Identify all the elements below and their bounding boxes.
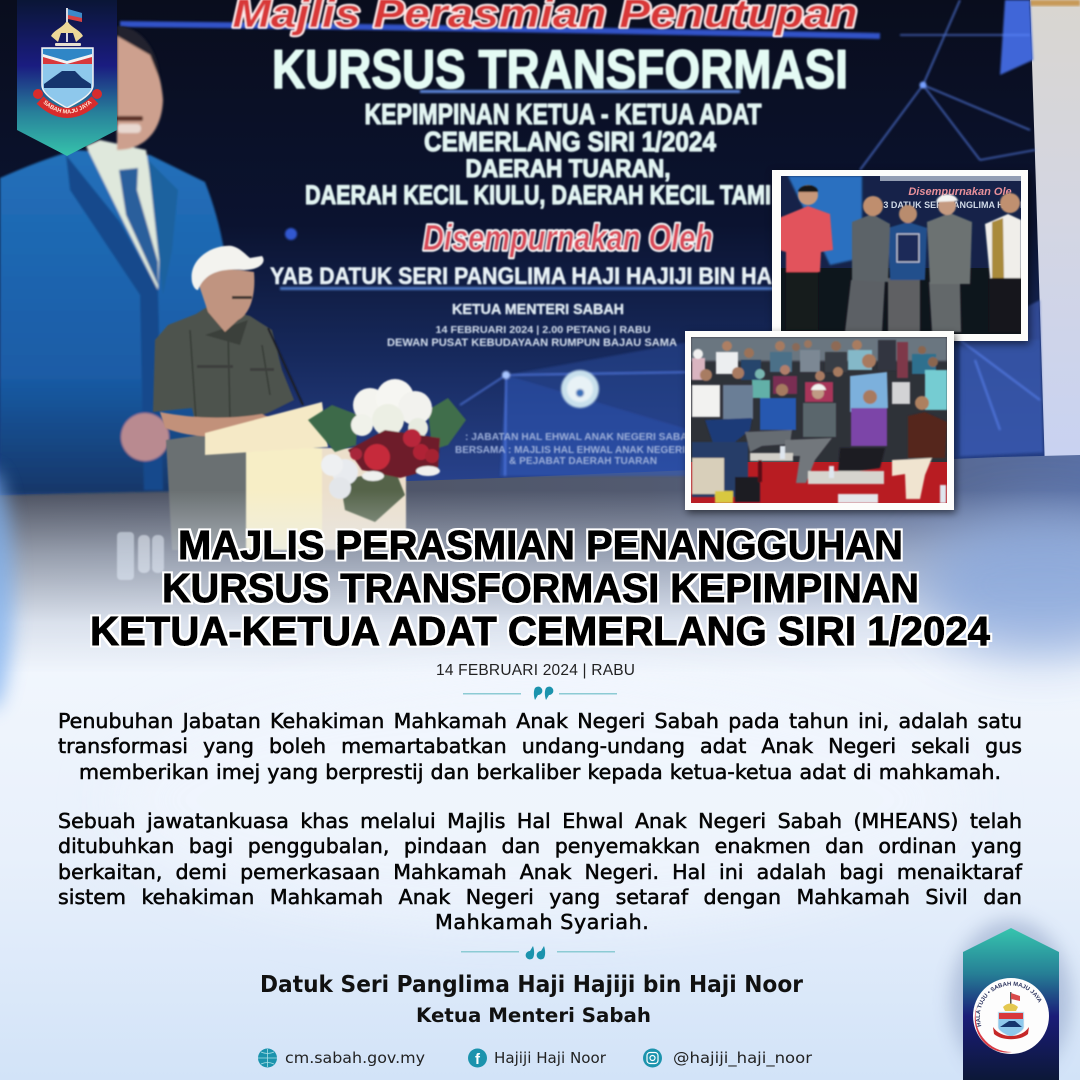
screen heading text: KETUA MENTERI SABAH (452, 301, 624, 318)
footer: facebook: Hajiji Haji Noor (494, 1049, 607, 1067)
body paragraph two: Mahkamah Syariah. (435, 910, 649, 934)
body paragraph one: Penubuhan Jabatan Kehakiman Mahkamah Anak Negeri Sabah pada tahun ini, adalah satu (58, 709, 1022, 733)
body paragraph two: Sebuah jawatankuasa khas melalui Majlis Hal Ehwal Anak Negeri Sabah (MHEANS) telah (58, 809, 1022, 833)
crest: flag and hands (51, 8, 83, 46)
screen heading text: DAERAH TUARAN, (466, 155, 670, 183)
main title: KURSUS TRANSFORMASI KEPIMPINAN (162, 565, 919, 611)
top banner with Sabah crest (17, 0, 117, 156)
venue wall at right (1020, 0, 1080, 470)
screen heading text: : JABATAN HAL EHWAL ANAK NEGERI SABAH (465, 432, 695, 443)
left edge tint (0, 470, 14, 710)
screen heading text: YAB DATUK SERI PANGLIMA HAJI HAJIJI BIN HA (270, 263, 772, 290)
round logo: Hala Tuju Sabah Maju Jaya (973, 978, 1049, 1054)
body paragraph two (58, 809, 1023, 934)
screen heading text: BERSAMA : MAJLIS HAL EHWAL ANAK NEGERI (455, 445, 685, 456)
handover scene: Disempurnakan Ole (908, 186, 1012, 198)
screen emblem (561, 370, 599, 408)
right floor tint (920, 515, 1080, 655)
soft mottled light glow (110, 670, 970, 930)
body paragraph two: ditubuhkan bagi penggubalan, pindaan dan penyemakkan enakmen dan ordinan yang (58, 834, 1022, 858)
inset photo: seated audience (685, 331, 954, 510)
top quote divider (463, 687, 617, 700)
bottom banner with logo (943, 912, 1079, 1080)
bottom quote divider (461, 946, 615, 959)
screen heading text: CEMERLANG SIRI 1/2024 (424, 126, 716, 157)
screen heading text: & PEJABAT DAERAH TUARAN (509, 456, 657, 467)
lectern (205, 402, 406, 550)
handover scene: 3 DATUK SERI PANGLIMA HAJI H (883, 200, 1027, 210)
fade into light background (0, 490, 1080, 674)
date line: 14 FEBRUARI 2024 | RABU (436, 662, 635, 679)
screen network pattern (120, 0, 1043, 476)
screen heading text: KURSUS TRANSFORMASI (272, 38, 848, 100)
portrait on screen: man in blue suit (0, 26, 240, 495)
table with water bottles (117, 532, 164, 580)
inset photo: handover ceremony (772, 170, 1028, 341)
body paragraph two: berkaitan, demi pemerkasaan Mahkamah Anak Negeri. Hal ini adalah bagi menaiktaraf (58, 860, 1022, 884)
body paragraph one: memberikan imej yang berprestij dan berkaliber kepada ketua-ketua adat di mahkamah. (79, 760, 1001, 784)
body paragraph two: sistem kehakiman Mahkamah Anak Negeri yang setaraf dengan Mahkamah Sivil dan (58, 885, 1022, 909)
crest: shield (42, 48, 93, 108)
footer: website: cm.sabah.gov.my (285, 1049, 425, 1067)
main title: KETUA-KETUA ADAT CEMERLANG SIRI 1/2024 (90, 608, 990, 654)
body paragraph one (58, 709, 1022, 784)
crest: motto ribbon (33, 89, 102, 118)
body paragraph one: transformasi yang boleh memartabatkan undang-undang adat Anak Negeri sekali gus (58, 734, 1022, 758)
main photo: speaker on stage (0, 0, 1080, 674)
screen heading text: DEWAN PUSAT KEBUDAYAAN RUMPUN BAJAU SAMA (387, 337, 677, 349)
footer: facebook: f (475, 1051, 481, 1068)
round logo: Hala Tuju Sabah Maju Jaya: HALA TUJU • SABAH MAJU JAYA (976, 982, 1042, 1027)
wall trim (1030, 0, 1080, 6)
screen heading text: Disempurnakan Oleh (423, 217, 713, 258)
screen heading text: DAERAH KECIL KIULU, DAERAH KECIL TAMI (305, 180, 771, 210)
stage screen backdrop (0, 0, 1045, 500)
footer: instagram: @hajiji_haji_noor (673, 1049, 813, 1068)
audience scene (691, 337, 947, 503)
handover scene (779, 176, 1027, 334)
main title (90, 522, 990, 654)
floral arrangement (308, 379, 466, 522)
crest: motto ribbon: SABAH MAJU JAYA (44, 100, 92, 114)
attribution role: Ketua Menteri Sabah (416, 1004, 651, 1027)
attribution name: Datuk Seri Panglima Haji Hajiji bin Haji Noor (260, 972, 804, 998)
screen heading text (232, 0, 858, 467)
speaker at lectern (153, 246, 303, 550)
screen heading text: 14 FEBRUARI 2024 | 2.00 PETANG | RABU (436, 325, 650, 336)
main title: MAJLIS PERASMIAN PENANGGUHAN (178, 522, 903, 568)
stage floor (0, 455, 1080, 672)
screen heading text: KEPIMPINAN KETUA - KETUA ADAT (364, 99, 762, 131)
